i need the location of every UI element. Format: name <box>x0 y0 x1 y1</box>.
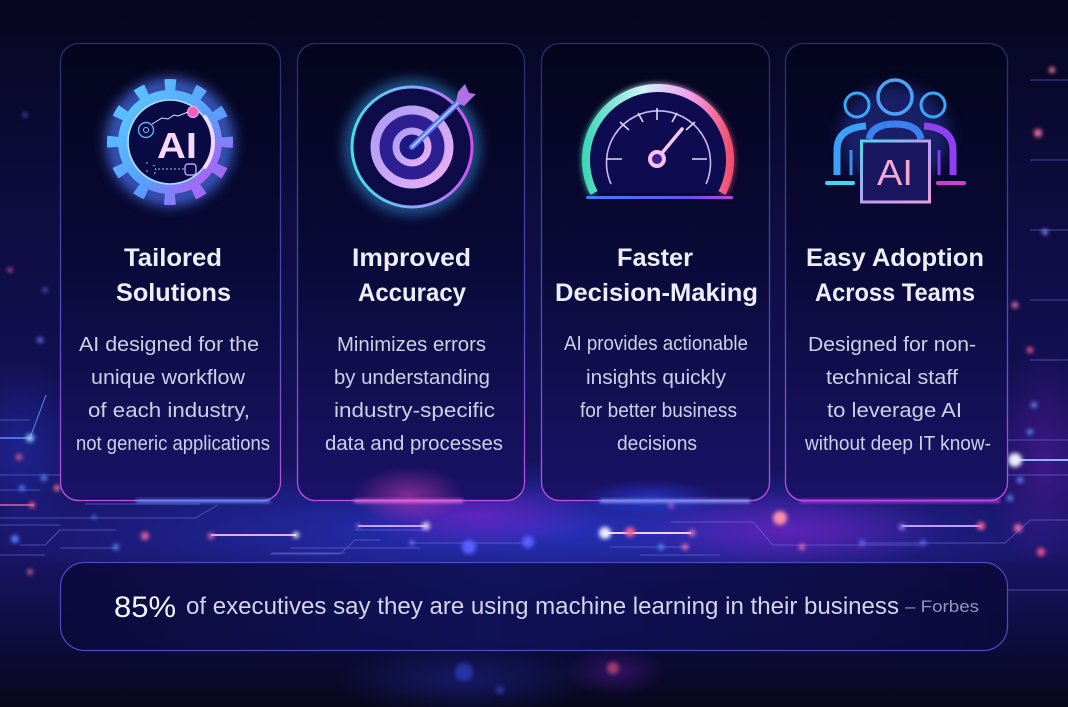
statistic 85%: 85% <box>114 591 176 624</box>
body text <box>76 334 270 455</box>
body text: data and processes <box>325 433 503 455</box>
panel: Easy Adoption Across Teams <box>786 44 1008 500</box>
title <box>352 244 471 307</box>
title <box>806 244 984 307</box>
body text: to leverage AI <box>827 400 962 422</box>
title: Faster <box>617 244 693 272</box>
body text <box>564 333 748 455</box>
title <box>116 244 231 307</box>
body text: for better business <box>580 400 737 422</box>
title: Decision-Making <box>555 279 758 307</box>
icon: target with arrow <box>351 84 476 208</box>
glowing lit traces <box>0 395 1068 535</box>
panel: Improved Accuracy <box>298 44 524 523</box>
title <box>555 244 758 307</box>
panel: statistic banner <box>60 562 1008 650</box>
circuit traces <box>0 80 1068 590</box>
title: Accuracy <box>358 279 466 307</box>
body text: decisions <box>617 433 697 455</box>
icon: speedometer gauge <box>586 88 733 199</box>
source: – Forbes <box>905 597 979 616</box>
AI label: AI <box>877 152 913 193</box>
title: Easy Adoption <box>806 244 984 272</box>
body text: technical staff <box>826 367 958 389</box>
body text: AI designed for the <box>79 334 259 356</box>
body text: industry-specific <box>334 400 495 422</box>
title: Improved <box>352 244 471 272</box>
body text: by understanding <box>334 367 490 389</box>
title: Across Teams <box>815 279 975 307</box>
body text: unique workflow <box>91 367 246 389</box>
statistic sentence: of executives say they are using machine learning in their business <box>186 593 899 620</box>
panel: Faster Decision-Making <box>542 44 770 516</box>
body text: AI provides actionable <box>564 333 748 355</box>
body text: of each industry, <box>88 400 250 422</box>
body text: Designed for non- <box>808 334 976 356</box>
body text: not generic applications <box>76 433 270 455</box>
body text <box>804 334 991 455</box>
panel: Tailored Solutions <box>60 44 280 500</box>
icon: gear with AI <box>113 85 227 199</box>
body text: Minimizes errors <box>337 334 486 356</box>
body text <box>325 334 503 455</box>
icon: team with AI briefcase <box>827 80 964 202</box>
AI label: AI <box>157 125 197 166</box>
body text: without deep IT know- <box>804 433 991 455</box>
card bottom edge glows <box>136 500 1000 502</box>
body text: insights quickly <box>586 367 726 389</box>
title: Solutions <box>116 279 231 307</box>
title: Tailored <box>124 244 222 272</box>
